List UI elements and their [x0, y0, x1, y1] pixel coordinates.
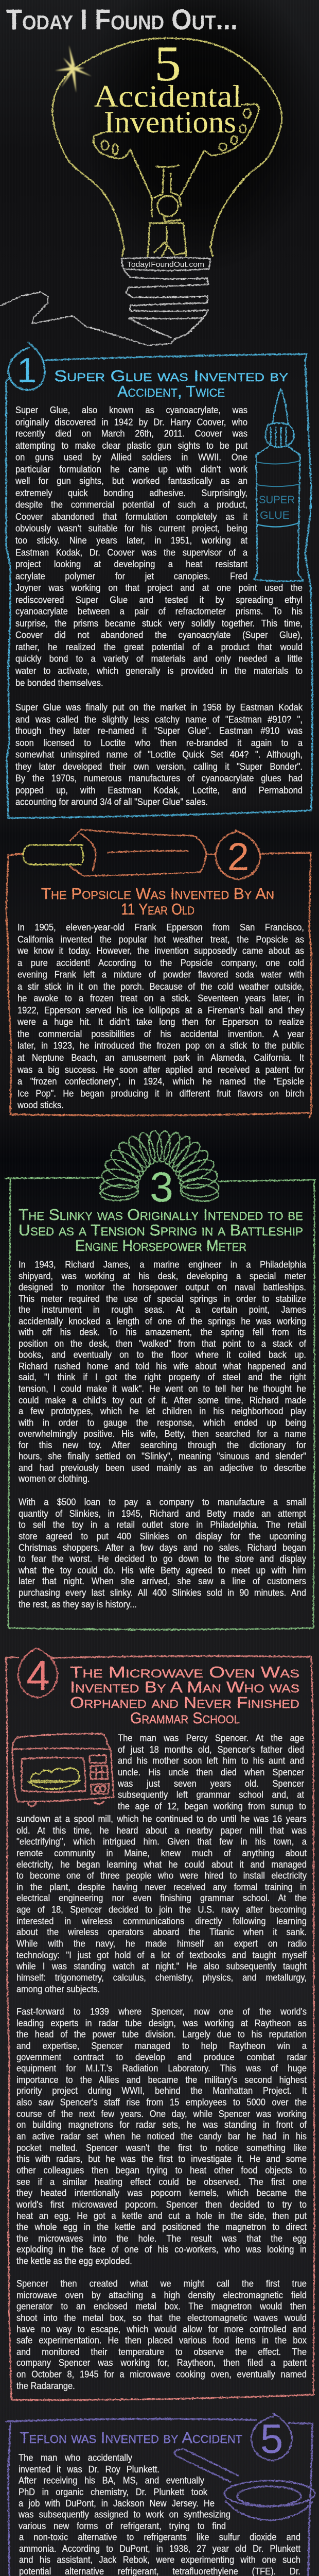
- body text: Richard James and the spring: and had previously been used mainly as an adjective to describe: [19, 1463, 306, 1473]
- body text: the first true microwave oven: safe experimentation. He then placed various food items in the box: [16, 2335, 307, 2346]
- body text: Spencer's early career: electrical engineering nor even finishing grammar school. At the: [16, 1893, 307, 1904]
- bulb title: 5 Accidental Inventions: 5: [154, 36, 181, 92]
- number badge 5: [251, 2414, 292, 2462]
- body text: Percy Spencer childhood, wrapped beside the microwave: the age of 12, began working from sunup to: [118, 1801, 306, 1811]
- body text: Dr. Roy Plunkett intro, wrapped beside the pan: PhD in organic chemistry, Dr. Plunkett took: [19, 2487, 207, 2497]
- body text: Frank Epperson story: the commercial possibilities of his accidental invention. A year: [17, 1029, 304, 1039]
- heading: Grammar School: [130, 1709, 240, 1727]
- body text: bringing super glue to market: they later developed their own version, calling it "Super Bonder".: [15, 761, 303, 772]
- illustration: bulb screw base and cord: [1, 258, 210, 345]
- body text: cyanoacrylate discovery: acrylate polymer for jet canopies. Fred: [15, 571, 247, 581]
- body text: the first true microwave oven: on October 8, 1945 for a microwave cooking oven, eventually named: [16, 2369, 307, 2380]
- body text: the first true microwave oven: and monitored their temperature to observe the effect. The: [16, 2347, 307, 2357]
- body text: cyanoacrylate discovery: rather, he realized the great potential of a product that would: [15, 642, 303, 653]
- body text: cyanoacrylate discovery: extremely quick bonding adhesive. Surprisingly,: [15, 488, 247, 498]
- number badge 5: 5: [260, 2416, 283, 2462]
- number badge 3: 3: [150, 1164, 173, 1211]
- body text: Spencer's early career: technology: "I just got hold of a lot of textbooks and taught myself: [16, 1950, 307, 1960]
- body text: Richard James and the spring: Richard rushed home and told his wife about what happened and: [19, 1361, 306, 1371]
- body text: bringing super glue to market: Super Glue was finally put on the market in 1958 by Eastman Kodak: [15, 702, 303, 713]
- body text: Frank Epperson story: a "frozen confectionery", in 1924, which he named the "Epsicle: [17, 1076, 304, 1087]
- body text: Percy Spencer childhood, wrapped beside the microwave: [117, 1733, 306, 1811]
- body text: cyanoacrylate discovery: be bonded themselves.: [15, 677, 103, 688]
- body text: Frank Epperson story: later, in 1923, he introduced the frozen pop on a stick to the public: [17, 1041, 304, 1051]
- body text: Dr. Roy Plunkett intro, wrapped beside the pan: After receiving his BA, MS, and eventually: [19, 2476, 204, 2486]
- body text: Raytheon and the melted candy bar: [16, 2007, 307, 2266]
- body text: bringing super glue to market: somewhat uninspired name of "Loctite Quick Set 404? ". Although,: [15, 750, 303, 760]
- body text: the first true microwave oven: microwave oven by attaching a high density electromagnetic field: [16, 2290, 307, 2300]
- body text: Raytheon and the melted candy bar: heat an egg. He got a kettle and cut a hole in the side, then put: [16, 2211, 307, 2221]
- body text: first Slinky sales: later that night. When she arrived, she saw a line of customers: [19, 1577, 306, 1587]
- body text: Raytheon and the melted candy bar: world's first microwaved popcorn. Spencer then decided to try to: [16, 2199, 307, 2210]
- body text: cyanoacrylate discovery: [15, 405, 303, 688]
- body text: Raytheon and the melted candy bar: the kettle as the egg exploded.: [16, 2256, 132, 2266]
- body text: cyanoacrylate discovery: water to activate, which generally is provided in the materials to: [15, 666, 303, 676]
- panel: slinky: [4, 1130, 316, 1631]
- body text: Frank Epperson story: a stir stick in it on the porch. Because of the cold weather outside,: [17, 981, 304, 992]
- body text: TFE experiment: [19, 2532, 300, 2576]
- body text: Raytheon and the melted candy bar: the microwaves into the hole. The result was that the egg: [16, 2233, 307, 2244]
- body text: Richard James and the spring: women or clothing.: [19, 1474, 90, 1484]
- body text: Percy Spencer childhood, wrapped beside the microwave: uncle. His uncle then died when Spencer: [118, 1767, 304, 1777]
- body text: the first true microwave oven: Spencer then created what we might call the first true: [16, 2279, 307, 2289]
- body text: TFE experiment: a non-toxic alternative to refrigerants like sulfur dioxide and: [19, 2532, 300, 2543]
- body text: Raytheon and the melted candy bar: equipment for M.I.T.'s Radiation Laboratory. This was of huge: [16, 2063, 307, 2074]
- body text: cyanoacrylate discovery: despite the commercial potential of such a product,: [15, 500, 247, 510]
- body text: Frank Epperson story: In 1905, eleven-year-old Frank Epperson from San Francisco,: [17, 922, 304, 933]
- body text: first Slinky sales: quantity of Slinkies, in 1945, Richard and Betty made an attempt: [19, 1509, 306, 1519]
- body text: Frank Epperson story: [17, 922, 305, 1110]
- panel border: [6, 354, 312, 818]
- bulb title: 5 Accidental Inventions: [94, 36, 242, 139]
- number badge 2: [216, 831, 260, 879]
- body text: bringing super glue to market: though they later re-named it "Super Glue". Eastman #910 was: [15, 726, 303, 736]
- body text: Spencer's early career: While with the navy, he made himself an expert on radio: [16, 1939, 307, 1949]
- body text: Raytheon and the melted candy bar: importance to the Allies and became the military's second highest: [16, 2075, 307, 2085]
- body text: TFE experiment: and his assistant, Jack Rebok, were experimenting with one such: [19, 2555, 300, 2565]
- body text: the first true microwave oven: have no way to escape, which would allow for more controlled and: [16, 2324, 307, 2334]
- body text: first Slinky sales: to fear the worst. He decided to go down to the store and display: [19, 1554, 306, 1564]
- illustration: light bulb glass: [52, 38, 282, 256]
- heading: The Slinky was Originally Intended to be: [19, 1206, 303, 1224]
- body text: Spencer's early career: "electrifying", which intrigued him. Given that few in his town, a: [16, 1837, 307, 1847]
- panel: teflon: [5, 2413, 316, 2576]
- body text: Richard James and the spring: the instrument in rough seas. At a certain point, James: [19, 1304, 306, 1315]
- icon: glue bottle: [254, 389, 303, 581]
- body text: Richard James and the spring: with off his desk. To his amazement, the spring fell from its: [19, 1327, 306, 1337]
- body text: Raytheon and the melted candy bar: see if a similar heating effect could be observed. The first one: [16, 2177, 307, 2187]
- body text: the first true microwave oven: generator to an enclosed metal box. The magnetron would then: [16, 2301, 307, 2312]
- body text: Dr. Roy Plunkett intro, wrapped beside the pan: The man who accidentally: [19, 2453, 132, 2463]
- body text: Richard James and the spring: could make a child's toy out of it. After some time, Richard made: [19, 1395, 306, 1405]
- number badge 4: [18, 1648, 58, 1699]
- body text: Richard James and the spring: This meter required the use of special springs in order to stabilize: [19, 1293, 306, 1303]
- body text: Richard James and the spring: for this new toy. After searching through the dictionary for: [19, 1440, 306, 1450]
- heading: Orphaned and Never Finished: [70, 1693, 299, 1711]
- body text: Richard James and the spring: shipyard, was working at his desk, developing a special meter: [19, 1270, 306, 1281]
- body text: Richard James and the spring: designed to monitor the horsepower output on naval battleships.: [19, 1282, 306, 1293]
- body text: Raytheon and the melted candy bar: exploding in the face of one of his co-workers, who was looking in: [16, 2245, 307, 2255]
- body text: bringing super glue to market: accounting for around 3/4 of all "Super Glue" sales.: [15, 797, 208, 807]
- body text: Spencer's early career: [16, 1814, 307, 1995]
- body text: cyanoacrylate discovery: originally discovered in 1942 by Dr. Harry Coover, who: [15, 417, 247, 427]
- body text: Frank Epperson story: evening Frank left a mixture of powder flavored soda water with: [17, 970, 304, 980]
- icon: popsicle: [23, 829, 216, 876]
- body text: cyanoacrylate discovery: quickly bond to a variety of materials and only needed a little: [15, 654, 303, 665]
- body text: cyanoacrylate discovery: Coover abandoned that formulation completely as it: [15, 512, 247, 522]
- body text: Frank Epperson story: California invented the popular hot weather treat, the Popsicle as: [17, 934, 304, 944]
- body text: TFE experiment: ammonia. According to DuPont, in 1938, 27 year old Dr. Plunkett: [19, 2544, 300, 2554]
- body text: Raytheon and the melted candy bar: other colleagues then began trying to heat other food objects to: [16, 2165, 307, 2176]
- icon: slinky: [100, 1130, 219, 1202]
- body text: first Slinky sales: the rest, as they say is history...: [19, 1599, 137, 1609]
- icon: glue bottle: SUPER: [259, 494, 295, 506]
- body text: Percy Spencer childhood, wrapped beside the microwave: of just 18 months old, Spencer's father died: [118, 1744, 304, 1755]
- body text: Raytheon and the melted candy bar: they heated intentionally was popcorn kernels, which became the: [16, 2188, 307, 2198]
- body text: Raytheon and the melted candy bar: the whole egg in the kettle and positioned the magnetron to direct: [16, 2222, 307, 2232]
- body text: cyanoacrylate discovery: recently died on March 26th, 2011. Coover was: [15, 429, 247, 439]
- body text: Raytheon and the melted candy bar: pocket melted. Spencer wasn't the first to notice something like: [16, 2143, 307, 2153]
- body text: Frank Epperson story: at Neptune Beach, an amusement park in Alameda, California. It: [17, 1053, 304, 1063]
- body text: Percy Spencer childhood, wrapped beside the microwave: and his mother soon left him to his aunt and: [118, 1756, 304, 1766]
- body text: bringing super glue to market: soon licensed to Loctite who then re-branded it again to a: [15, 738, 303, 748]
- icon: glue bottle: GLUE: [260, 510, 290, 521]
- panel: super glue: [5, 341, 314, 820]
- heading: 11 Year Old: [121, 900, 194, 918]
- body text: the first true microwave oven: [16, 2279, 307, 2392]
- heading: [70, 1663, 299, 1727]
- bulb title: 5 Accidental Inventions: Inventions: [104, 105, 236, 139]
- body text: cyanoacrylate discovery: Super Glue, also known as cyanoacrylate, was: [15, 405, 247, 415]
- heading: Engine Horsepower Meter: [75, 1236, 246, 1255]
- icon: spark on the bulb: [55, 45, 92, 93]
- body text: the first true microwave oven: company Spencer was working for, Raytheon, then filed a patent: [16, 2358, 307, 2368]
- body text: Raytheon and the melted candy bar: on building magnetrons for radar sets, he was standing in front of: [16, 2120, 307, 2130]
- body text: Richard James and the spring: [19, 1260, 307, 1484]
- body text: Frank Epperson story: we know it today. However, the invention supposedly came about as: [17, 946, 304, 956]
- heading: The Microwave Oven Was: [70, 1663, 299, 1681]
- body text: Spencer's early career: while I was standing watch at night." He also subsequently taught: [16, 1961, 307, 1972]
- body text: cyanoacrylate discovery: well for gun sights, but worked fantastically as an: [15, 476, 247, 486]
- body text: Spencer's early career: old. At this time, he heard about a nearby paper mill that was: [16, 1825, 307, 1836]
- body text: Richard James and the spring: accidentally knocked a length of one of the springs he was working: [19, 1316, 306, 1326]
- body text: Richard James and the spring: tension, I could make it walk". He went on to tell her he thought he: [19, 1383, 306, 1394]
- body text: first Slinky sales: store agreed to put 400 Slinkies on display for the upcoming: [19, 1531, 306, 1541]
- body text: Dr. Roy Plunkett intro, wrapped beside the pan: various new forms of refrigerant, trying to find: [19, 2521, 226, 2531]
- body text: first Slinky sales: what the toy could do. His wife Betty agreed to meet up with him: [19, 1565, 306, 1575]
- heading: Used as a Tension Spring in a Battleship: [19, 1221, 303, 1239]
- body text: Spencer's early career: in the plant, despite having never received any formal training in: [16, 1882, 307, 1892]
- body text: Spencer's early career: remote community in Maine, knew much of anything about: [16, 1848, 307, 1858]
- body text: Raytheon and the melted candy bar: leading experts in radar tube design, was working at Raytheon as: [16, 2018, 307, 2028]
- body text: bringing super glue to market: and was called the slightly less catchy name of "Eastman #910? ",: [15, 714, 303, 724]
- heading: [41, 885, 274, 918]
- body text: Raytheon and the melted candy bar: government contract to develop and produce combat radar: [16, 2052, 307, 2062]
- body text: Spencer's early career: electricity, he began learning what he could about it and managed: [16, 1859, 307, 1870]
- body text: Spencer's early career: to become one of three people who were hired to install electricity: [16, 1871, 307, 1881]
- body text: Richard James and the spring: with in order to gauge the response, which ended up being: [19, 1417, 306, 1428]
- body text: Raytheon and the melted candy bar: this with radars, but he was the first to investigate it. He and some: [16, 2154, 307, 2164]
- body text: Spencer's early career: about the wireless operators aboard the Titanic when it sank.: [16, 1927, 307, 1938]
- body text: first Slinky sales: purchasing every last slinky. All 400 Slinkies sold in 90 minutes. And: [19, 1588, 306, 1598]
- heading: Accident, Twice: [117, 382, 225, 400]
- body text: first Slinky sales: With a $500 loan to pay a company to manufacture a small: [19, 1497, 306, 1507]
- body text: Spencer's early career: himself: trigonometry, calculus, chemistry, physics, and metallurgy,: [16, 1973, 307, 1983]
- body text: cyanoacrylate discovery: cyanoacrylate between a pair of refractometer prisms. To his: [15, 606, 303, 617]
- body text: the first true microwave oven: the Radarange.: [16, 2381, 75, 2391]
- body text: Raytheon and the melted candy bar: Fast-forward to 1939 where Spencer, now one of the world's: [16, 2007, 307, 2017]
- body text: cyanoacrylate discovery: obviously wasn't suitable for his current project, being: [15, 523, 247, 534]
- body text: Raytheon and the melted candy bar: course of the next few years. One day, while Spencer was working: [16, 2109, 307, 2119]
- body text: Frank Epperson story: Ice Pop". He began producing it in different fruit flavors on birch: [17, 1088, 304, 1098]
- panel: popsicle: [5, 828, 313, 1118]
- body text: Frank Epperson story: he awoke to a frozen treat on a stick. Seventeen years later, in: [17, 993, 304, 1004]
- body text: Spencer's early career: sundown at a spool mill, which he continued to do until he was 16 years: [16, 1814, 307, 1824]
- body text: cyanoacrylate discovery: particular formulation he came up with didn't work: [15, 464, 247, 474]
- panel border: [6, 1656, 314, 2400]
- body text: bringing super glue to market: popped up, with Eastman Kodak, Loctite, and Permabond: [15, 785, 303, 795]
- body text: Frank Epperson story: 1922, Epperson served his ice lollipops at a Fireman's ball and they: [17, 1005, 304, 1015]
- body text: Richard James and the spring: position on the desk, then "walked" from that point to a stack of: [19, 1338, 306, 1349]
- body text: Dr. Roy Plunkett intro, wrapped beside the pan: invented it was Dr. Roy Plunkett.: [19, 2464, 160, 2475]
- body text: Dr. Roy Plunkett intro, wrapped beside the pan: was subsequently assigned to work on synthesizing: [19, 2510, 231, 2520]
- body text: cyanoacrylate discovery: attempting to make clear plastic gun sights to be put: [15, 440, 247, 451]
- body text: cyanoacrylate discovery: Joyner was working on that project and at one point used the: [15, 583, 303, 593]
- body text: cyanoacrylate discovery: on guns used by Allied soldiers in WWII. One: [15, 452, 247, 463]
- body text: cyanoacrylate discovery: Eastman Kodak, Dr. Coover was the supervisor of a: [15, 547, 247, 557]
- panel border: [6, 853, 311, 1117]
- body text: first Slinky sales: Christmas shoppers. After a few days and no sales, Richard began: [19, 1543, 306, 1553]
- bulb title: 5 Accidental Inventions: Accidental: [94, 79, 242, 113]
- body text: cyanoacrylate discovery: Coover did not abandoned the cyanoacrylate (Super Glue),: [15, 630, 303, 641]
- icon: frying pan: [175, 2449, 315, 2520]
- title: Today I Found Out: Today I Found Out...: [6, 3, 238, 36]
- icon: microwave oven: [12, 1734, 114, 1806]
- body text: Richard James and the spring: books, and eventually on to the floor where it coiled back up.: [19, 1350, 306, 1360]
- bulb label: TodayIFoundOut.com: TodayIFoundOut.com: [127, 260, 204, 269]
- body text: cyanoacrylate discovery: too sticky. Nine years later, in 1951, working at: [15, 535, 247, 546]
- body text: Percy Spencer childhood, wrapped beside the microwave: was just seven years old. Spencer: [118, 1778, 304, 1789]
- body text: Richard James and the spring: said, "I think if I got the right property of steel and the right: [19, 1372, 306, 1383]
- body text: Dr. Roy Plunkett intro, wrapped beside the pan: a job with DuPont, in Jackson New Jersey. He: [19, 2498, 215, 2509]
- body text: bringing super glue to market: [15, 702, 303, 807]
- panel border: [5, 1178, 315, 1630]
- body text: Spencer's early career: among other subjects.: [16, 1984, 100, 1994]
- body text: Dr. Roy Plunkett intro, wrapped beside the pan: [19, 2453, 231, 2532]
- body text: Frank Epperson story: was a big success. He soon after applied and received a patent for: [17, 1064, 304, 1075]
- body text: Raytheon and the melted candy bar: also saw Spencer's staff rise from 15 employees to 5000 over the: [16, 2097, 307, 2108]
- panel: microwave oven: [5, 1648, 316, 2402]
- body text: Frank Epperson story: a pure accident! According to the Popsicle company, one cold: [17, 958, 304, 968]
- body text: Raytheon and the melted candy bar: and expertise, Spencer managed to help Raytheon win a: [16, 2041, 307, 2051]
- heading: The Popsicle Was Invented By An: [41, 885, 274, 903]
- body text: first Slinky sales: to sell the toy in a retail outlet store in Philadelphia. The retail: [19, 1520, 306, 1530]
- heading: Super Glue was Invented by: [54, 367, 288, 385]
- number badge 4: 4: [26, 1652, 50, 1699]
- body text: Raytheon and the melted candy bar: priority project during WWII, behind the Manhattan Project. It: [16, 2086, 307, 2096]
- body text: the first true microwave oven: shoot into the metal box, so that the electromagnetic waves would: [16, 2313, 307, 2323]
- body text: Richard James and the spring: overwhelmingly positive. His wife, Betty, then searched for a name: [19, 1429, 306, 1439]
- body text: Spencer's early career: interested in wireless communications directly following learning: [16, 1916, 307, 1926]
- body text: Raytheon and the melted candy bar: the head of the power tube division. Largely due to his reputation: [16, 2029, 307, 2040]
- body text: Richard James and the spring: hours, she finally settled on "Slinky", meaning "sinuous and slender": [19, 1451, 306, 1462]
- body text: Frank Epperson story: wood sticks.: [17, 1100, 64, 1110]
- heading: [54, 367, 288, 400]
- panel border: [6, 2419, 313, 2576]
- body text: Percy Spencer childhood, wrapped beside the microwave: The man was Percy Spencer. At the age: [118, 1733, 304, 1743]
- body text: Richard James and the spring: In 1943, Richard James, a marine engineer in a Philadelphia: [19, 1260, 306, 1270]
- body text: Raytheon and the melted candy bar: an active radar set when he noticed the candy bar he had in his: [16, 2131, 307, 2142]
- body text: Richard James and the spring: a few prototypes, which he let children in his neighborhood play: [19, 1406, 306, 1416]
- body text: Frank Epperson story: were a huge hit. It didn't take long then for Epperson to realize: [17, 1017, 304, 1027]
- body text: cyanoacrylate discovery: surprise, the prisms became stuck very solidly together. This time,: [15, 618, 303, 629]
- number badge 1: 1: [17, 351, 37, 390]
- heading: Teflon was Invented by Accident: [20, 2429, 242, 2447]
- body text: cyanoacrylate discovery: rediscovered Super Glue and tested it by spreading ethyl: [15, 595, 303, 605]
- header: title and light bulb: [0, 3, 283, 346]
- heading: Invented By A Man Who was: [70, 1678, 299, 1696]
- body text: first Slinky sales: [19, 1497, 307, 1609]
- body text: bringing super glue to market: By the 1970s, numerous manufactures of cyanoacrylate glues had: [15, 773, 303, 784]
- number badge 1: [8, 343, 45, 390]
- body text: Percy Spencer childhood, wrapped beside the microwave: subsequently left grammar school and, at: [118, 1790, 304, 1800]
- number badge 2: 2: [227, 835, 249, 879]
- body text: cyanoacrylate discovery: project looking at developing a heat resistant: [15, 559, 247, 569]
- body text: Spencer's early career: age of 18, Spencer decided to join the U.S. navy after becoming: [16, 1905, 307, 1915]
- heading: [19, 1206, 303, 1255]
